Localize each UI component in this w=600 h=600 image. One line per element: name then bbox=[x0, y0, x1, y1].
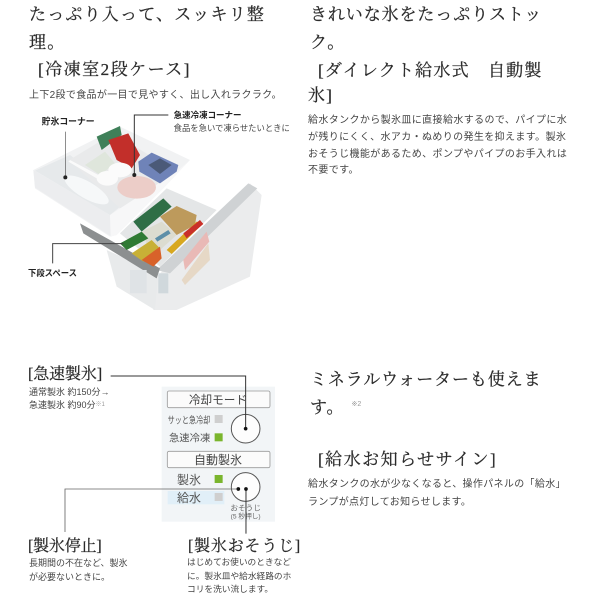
arrow: ice cleaning leader bbox=[244, 487, 248, 534]
label: cleaning press five seconds: おそうじ bbox=[230, 503, 261, 512]
heading: mineral water can be used: ミネラルウォーターも使えま bbox=[310, 370, 542, 389]
text: direct water supply description: が残りにくく、水アカ・ぬめりの発生を抑えます。製氷 bbox=[308, 132, 566, 143]
button label: cooling mode: 冷却モード bbox=[189, 394, 247, 407]
button: ice making dial bbox=[231, 473, 260, 501]
callout: quick freezing corner bbox=[132, 110, 290, 177]
label: cleaning press five seconds bbox=[230, 503, 261, 521]
text: quick ice making times: 急速製氷 約90分※1 bbox=[29, 400, 105, 410]
callout: ice storage corner bbox=[42, 115, 95, 179]
text: direct water supply description: 給水タンクから製氷皿に直接給水するので、パイプに水 bbox=[308, 115, 567, 126]
text: ice making cleaning description bbox=[187, 557, 291, 594]
heading: plenty of storage bbox=[29, 5, 265, 52]
text: freezer description: 上下2段で食品が一目で見やすく、出し入れラクラク。 bbox=[29, 90, 282, 101]
text: water supply notification description: ランプが点灯してお知らせします。 bbox=[308, 497, 471, 508]
heading: water supply notification sign: [給水お知らせサイン] bbox=[318, 450, 497, 469]
text: direct water supply description: 不要です。 bbox=[308, 165, 359, 176]
icon: lower drawer food packages bbox=[120, 198, 203, 267]
panel: cooling mode and ice making bbox=[162, 387, 275, 522]
arrow: ice stop leader bbox=[65, 487, 240, 532]
heading: direct water supply automatic ice maker bbox=[308, 61, 543, 105]
text: ice making stop description bbox=[29, 558, 128, 582]
callout: quick freezing corner: 急速冷凍コーナー bbox=[174, 110, 242, 120]
indicator: quick chill: サッと急冷却 bbox=[168, 415, 210, 427]
callout: lower space bbox=[28, 244, 123, 278]
text: quick ice making times bbox=[29, 387, 110, 410]
heading: mineral water can be used bbox=[310, 370, 542, 417]
text: ice making stop description: 長期間の不在など、製氷 bbox=[29, 558, 128, 568]
callout: ice storage corner: 貯氷コーナー bbox=[42, 115, 95, 126]
arrow: quick ice leader bbox=[111, 376, 247, 430]
heading: ice making cleaning: [製氷おそうじ] bbox=[188, 538, 301, 555]
text: ice making cleaning description: に。製氷皿や給水経路のホ bbox=[187, 570, 291, 580]
indicator: water supply: 給水 bbox=[177, 491, 201, 505]
callout: quick freezing corner: 食品を急いで凍らせたいときに bbox=[174, 123, 290, 133]
text: ice making stop description: が必要ないときに。 bbox=[29, 572, 110, 582]
label: cleaning press five seconds: (5 秒押し) bbox=[231, 512, 261, 521]
text: quick ice making times: 通常製氷 約150分→ bbox=[29, 387, 110, 397]
heading: quick ice making: [急速製氷] bbox=[28, 366, 102, 383]
text: water supply notification description: 給水タンクの水が少なくなると、操作パネルの「給水」 bbox=[308, 479, 566, 490]
indicator: quick freeze: 急速冷凍 bbox=[169, 431, 210, 444]
heading: ice making stop: [製氷停止] bbox=[28, 538, 101, 555]
heading: plenty of clean water: きれいな氷をたっぷりストッ bbox=[310, 5, 542, 24]
heading: plenty of storage: 理。 bbox=[29, 33, 65, 52]
heading: mineral water can be used: す。 ※2 bbox=[310, 398, 361, 417]
heading: direct water supply automatic ice maker: [ダイレクト給水式 自動製 bbox=[318, 61, 543, 80]
text: ice making cleaning description: コリを洗い流します。 bbox=[187, 584, 273, 594]
indicator: ice making: 製氷 bbox=[177, 473, 201, 487]
text: direct water supply description: おそうじ機能があるため、ポンプやパイプのお手入れは bbox=[308, 149, 567, 160]
button label: automatic ice making: 自動製氷 bbox=[194, 453, 242, 467]
heading: direct water supply automatic ice maker: 氷] bbox=[308, 86, 333, 105]
icon: upper freezer tray bbox=[33, 126, 190, 237]
text: ice making cleaning description: はじめてお使いのときなど bbox=[187, 557, 291, 567]
heading: two-tier freezer case: [冷凍室2段ケース] bbox=[38, 60, 191, 79]
icon: refrigerator door bbox=[80, 183, 262, 310]
button: cooling mode dial bbox=[231, 414, 260, 443]
heading: plenty of clean water: ク。 bbox=[310, 33, 345, 52]
callout: lower space: 下段スペース bbox=[28, 268, 77, 278]
text: water supply notification description bbox=[308, 478, 566, 508]
text: direct water supply description bbox=[308, 114, 567, 176]
heading: plenty of storage: たっぷり入って、スッキリ整 bbox=[29, 5, 265, 24]
heading: plenty of clean water bbox=[310, 5, 542, 52]
